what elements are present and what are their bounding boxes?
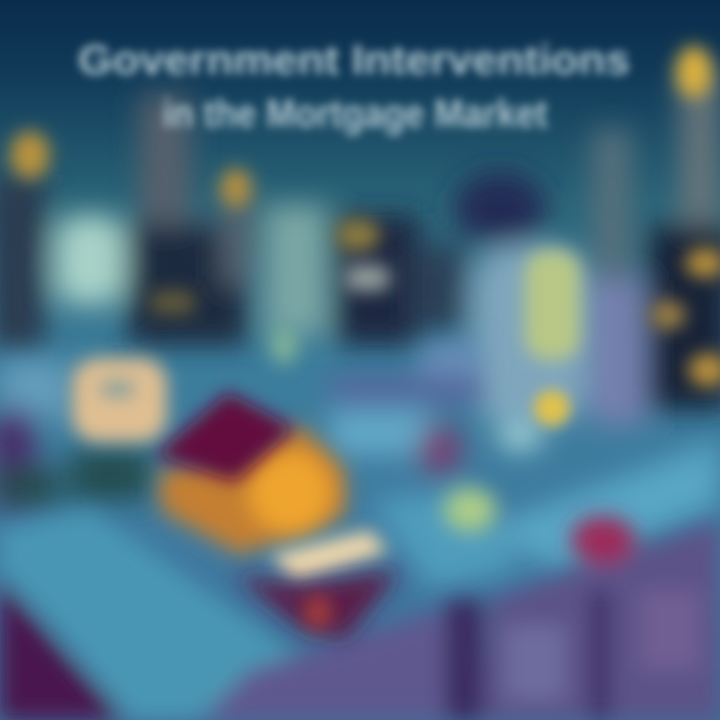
icon: house <box>155 392 400 640</box>
icon: blurred sun <box>534 390 570 426</box>
foreground ground plane <box>0 488 720 720</box>
house roof <box>155 392 295 482</box>
title: in the Mortgage Market <box>162 92 548 136</box>
title <box>78 36 630 136</box>
lit windows and lamps <box>10 46 720 387</box>
house wall <box>160 425 345 555</box>
mid-ground water and hills <box>0 345 720 590</box>
open book base <box>270 530 388 582</box>
title: Government Interventions <box>78 36 630 83</box>
icon: document card <box>72 358 167 442</box>
house bright side <box>248 450 332 534</box>
skyline buildings <box>0 70 720 425</box>
path under book <box>235 570 400 640</box>
